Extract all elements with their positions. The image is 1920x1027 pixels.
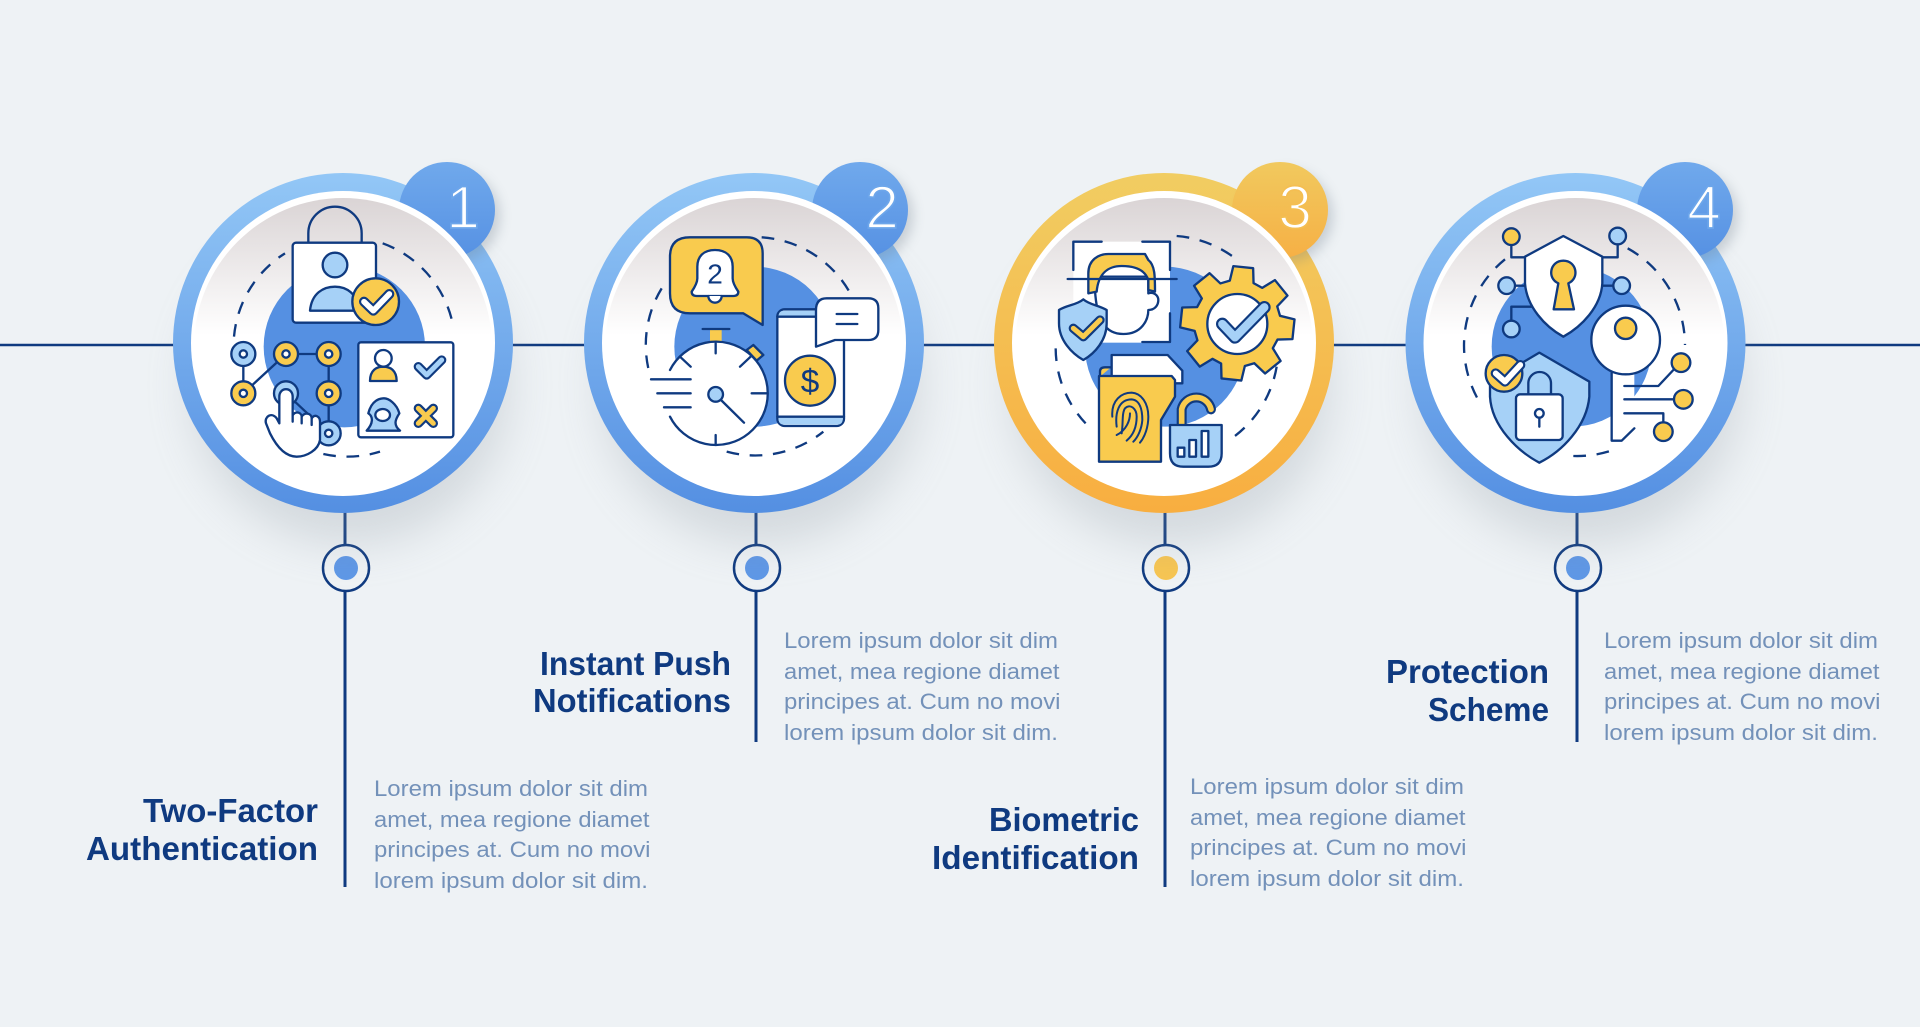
connector with node 1 bbox=[323, 505, 369, 887]
heading 4: Scheme bbox=[1428, 691, 1549, 728]
icon: biometric identification bbox=[1056, 236, 1299, 467]
text block 2: amet, mea regione diamet bbox=[784, 659, 1060, 684]
heading 2: Notifications bbox=[533, 682, 731, 719]
text block 3: amet, mea regione diamet bbox=[1190, 805, 1466, 830]
text block 3: principes at. Cum no movi bbox=[1190, 835, 1466, 860]
text block 1: Lorem ipsum dolor sit dim bbox=[374, 776, 648, 801]
text block 1: principes at. Cum no movi bbox=[374, 837, 650, 862]
heading 4: Protection bbox=[1386, 653, 1549, 690]
connector with node 2 bbox=[734, 505, 780, 742]
circle badge 1: 1 bbox=[446, 174, 480, 241]
icon: instant push notifications: 2 bbox=[707, 258, 723, 289]
circle badge 4 bbox=[1406, 162, 1746, 545]
connector with node 4 bbox=[1555, 505, 1601, 742]
circle badge 2: 2 bbox=[865, 174, 899, 241]
text block 1: amet, mea regione diamet bbox=[374, 807, 650, 832]
circle badge 1 bbox=[173, 162, 513, 545]
text block 4 bbox=[1604, 628, 1880, 745]
text block 1 bbox=[374, 776, 650, 893]
circle badge 4: 4 bbox=[1687, 174, 1721, 241]
text block 4: principes at. Cum no movi bbox=[1604, 689, 1880, 714]
text block 4: lorem ipsum dolor sit dim. bbox=[1604, 720, 1878, 745]
heading 4 bbox=[1386, 653, 1549, 728]
icon: instant push notifications: $ bbox=[801, 363, 819, 400]
connector with node 3 bbox=[1143, 505, 1189, 887]
heading 3: Biometric bbox=[989, 801, 1139, 838]
heading 1: Authentication bbox=[86, 830, 318, 867]
heading 3 bbox=[932, 801, 1139, 876]
text block 2: principes at. Cum no movi bbox=[784, 689, 1060, 714]
heading 1: Two-Factor bbox=[143, 792, 318, 829]
icon: protection scheme bbox=[1464, 228, 1693, 463]
icon: instant push notifications bbox=[646, 237, 878, 455]
heading 1 bbox=[86, 792, 318, 867]
circle badge 3 bbox=[994, 162, 1334, 545]
text block 2: Lorem ipsum dolor sit dim bbox=[784, 628, 1058, 653]
text block 1: lorem ipsum dolor sit dim. bbox=[374, 868, 648, 893]
step 1 bbox=[86, 162, 650, 893]
text block 3: Lorem ipsum dolor sit dim bbox=[1190, 774, 1464, 799]
text block 4: Lorem ipsum dolor sit dim bbox=[1604, 628, 1878, 653]
heading 2: Instant Push bbox=[540, 645, 731, 682]
icon: two-factor authentication bbox=[231, 207, 453, 457]
timeline horizontal line bbox=[0, 344, 1920, 346]
heading 2 bbox=[533, 645, 731, 719]
step 3 bbox=[932, 162, 1466, 891]
step 2 bbox=[533, 162, 1060, 745]
circle badge 3: 3 bbox=[1278, 174, 1312, 241]
heading 3: Identification bbox=[932, 839, 1139, 876]
text block 3 bbox=[1190, 774, 1466, 891]
text block 3: lorem ipsum dolor sit dim. bbox=[1190, 866, 1464, 891]
text block 2 bbox=[784, 628, 1060, 745]
circle badge 2 bbox=[584, 162, 924, 545]
text block 2: lorem ipsum dolor sit dim. bbox=[784, 720, 1058, 745]
text block 4: amet, mea regione diamet bbox=[1604, 659, 1880, 684]
step 4 bbox=[1386, 162, 1880, 745]
